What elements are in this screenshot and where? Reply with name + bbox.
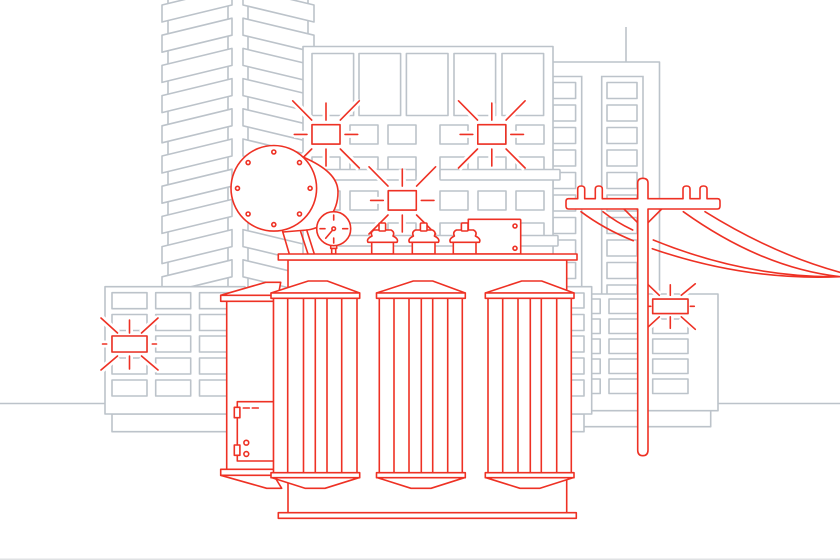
radiator 3 <box>485 281 574 488</box>
tank bottom plate <box>278 513 576 518</box>
overhead wires <box>581 212 840 277</box>
building: lower left block <box>105 287 245 432</box>
control box <box>468 219 521 254</box>
pole braces <box>624 209 662 223</box>
building: right tower with antenna <box>540 27 660 302</box>
round conservator tank <box>231 146 338 232</box>
tank top plate <box>278 254 577 260</box>
pole and cross arm outline with insulators <box>566 178 720 456</box>
burst: lit window top right <box>458 100 525 168</box>
bushing 3 <box>450 223 480 254</box>
burst: lit window left building <box>101 318 158 370</box>
building: tall chevron tower <box>162 0 314 294</box>
horizon line <box>0 402 840 404</box>
bushing 2 <box>409 223 439 254</box>
bushing 1 <box>368 223 398 254</box>
burst: lit window top left <box>292 100 360 168</box>
utility pole <box>566 178 840 456</box>
building: lower right block <box>550 287 718 432</box>
tank body <box>288 260 567 513</box>
radiator 2 <box>376 281 465 488</box>
transformer <box>221 146 577 518</box>
cabinet door <box>234 402 273 461</box>
bottom edge line <box>0 558 840 560</box>
radiator 1 <box>271 281 360 488</box>
tank support pipes <box>283 230 314 254</box>
burst: lit window centre <box>369 166 436 234</box>
pressure gauge <box>317 212 351 254</box>
building: central block <box>303 46 560 266</box>
side cabinet <box>221 282 282 488</box>
burst: lit window right building <box>648 284 695 329</box>
